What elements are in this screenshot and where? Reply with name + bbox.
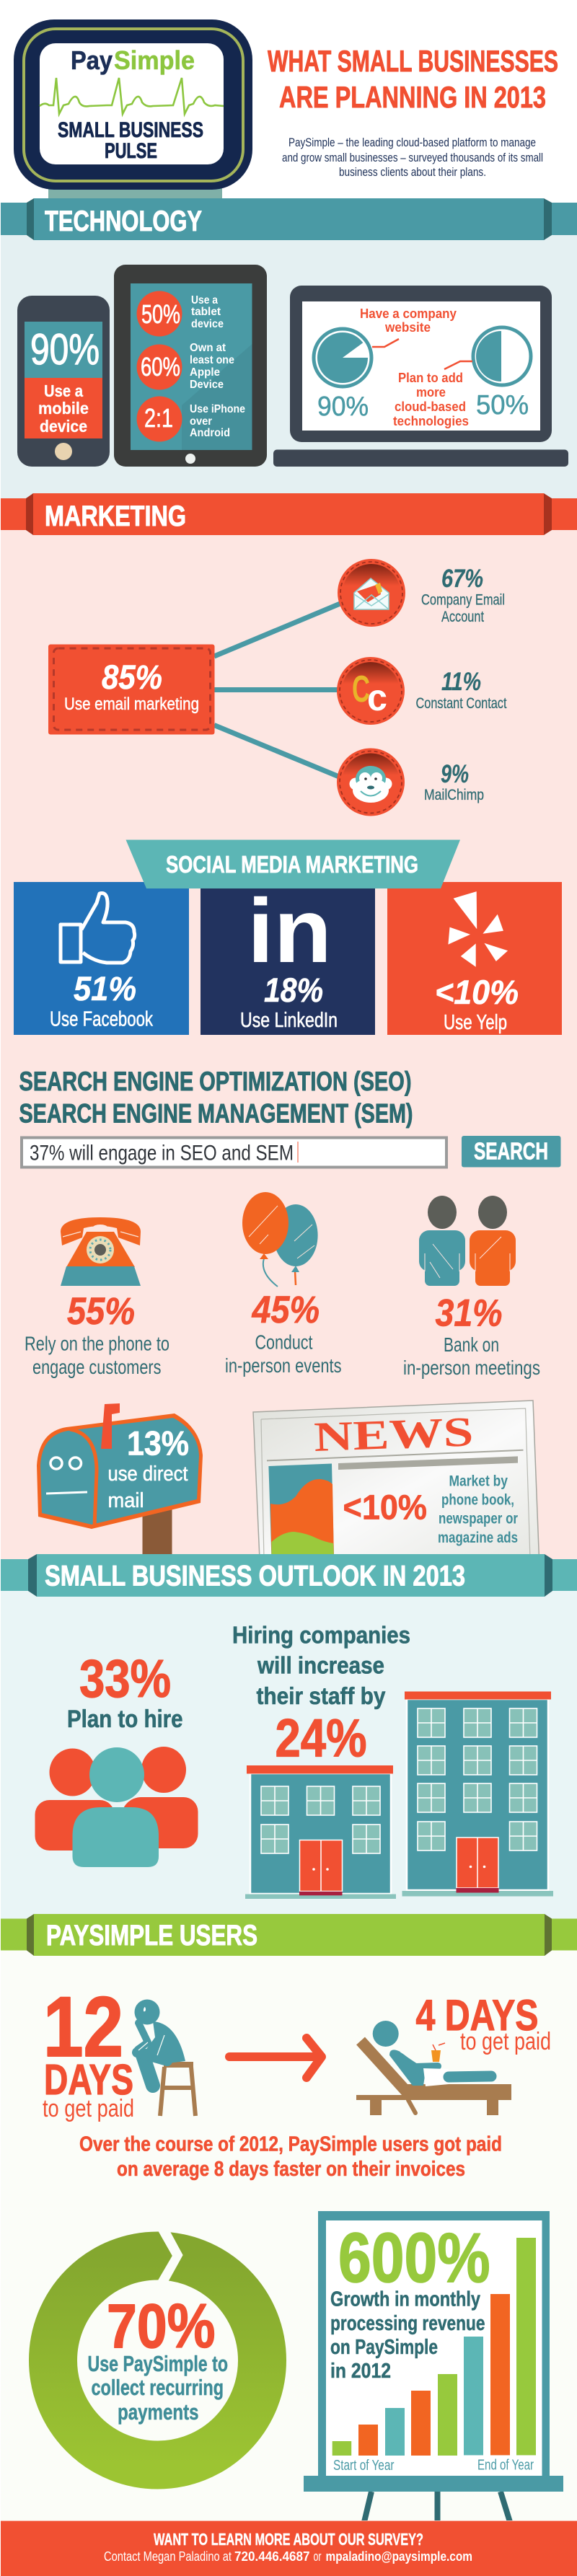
logo wordmark: Pay <box>71 45 113 75</box>
stat: meetings: in-person meetings <box>403 1357 540 1379</box>
tablet: device <box>191 318 224 330</box>
tablet: Android <box>190 427 230 439</box>
footer: or <box>313 2549 322 2564</box>
paysimple users banner <box>1 1914 577 1956</box>
facebook card <box>14 882 189 1035</box>
newspaper chart <box>268 1464 334 1559</box>
stat: phone: engage customers <box>32 1356 162 1378</box>
laptop captions: technologies <box>393 414 469 428</box>
icon: two people <box>419 1196 516 1286</box>
mailbox: 13% <box>127 1424 189 1463</box>
laptop <box>273 286 568 467</box>
laptop captions: cloud-based <box>395 400 466 414</box>
social media marketing banner: SOCIAL MEDIA MARKETING <box>166 851 418 878</box>
email service stats <box>415 565 507 803</box>
tablet: tablet <box>191 306 221 318</box>
tablet: Apple <box>190 366 220 379</box>
hiring companies text: 24% <box>276 1708 366 1768</box>
connector lines <box>214 603 342 777</box>
mailbox <box>37 1403 203 1559</box>
stat: events: in-person events <box>225 1354 342 1377</box>
donut chart: 70 percent: Use PaySimple to <box>88 2351 228 2376</box>
tablet: Own at <box>190 342 226 354</box>
donut chart: 70 percent: payments <box>118 2399 199 2425</box>
linkedin card: Use LinkedIn <box>240 1009 338 1032</box>
hiring companies text: Hiring companies <box>232 1621 410 1649</box>
hiring companies text <box>232 1621 410 1768</box>
presentation board: on PaySimple <box>330 2336 438 2359</box>
outlook banner: SMALL BUSINESS OUTLOOK IN 2013 <box>45 1561 465 1592</box>
tablet <box>114 265 267 467</box>
stat: meetings <box>403 1292 540 1379</box>
stat: events: 45% <box>252 1289 320 1331</box>
pie chart: 90 percent <box>314 329 399 422</box>
presentation board: in 2012 <box>330 2360 391 2383</box>
mobile phone: mobile <box>38 399 89 418</box>
logo wordmark: Simple <box>114 45 195 75</box>
logo monitor <box>14 19 252 200</box>
footer: Contact Megan Paladino at <box>104 2549 232 2564</box>
newspaper masthead: NEWS <box>313 1408 474 1460</box>
tablet: least one <box>190 354 234 366</box>
footer: 720.446.4687 <box>234 2549 310 2564</box>
email service stats: MailChimp <box>424 787 484 803</box>
search box <box>22 1138 446 1167</box>
search button <box>462 1136 561 1167</box>
faster payment statement: Over the course of 2012, PaySimple users got paid <box>79 2133 502 2156</box>
yelp card <box>387 882 562 1035</box>
title <box>268 44 558 114</box>
logo subtitle <box>58 118 203 163</box>
footer: mpaladino@paysimple.com <box>326 2549 472 2564</box>
icon: thumbs up <box>61 893 135 963</box>
icon: mailchimp <box>337 749 405 816</box>
icon: envelope <box>338 559 405 627</box>
icon: constant contact: C <box>352 669 370 710</box>
linkedin card: 18% <box>264 971 323 1009</box>
tablet: 60% <box>141 352 180 381</box>
newspaper: magazine ads <box>438 1530 518 1546</box>
yelp card: <10% <box>435 973 519 1011</box>
seo heading: SEARCH ENGINE MANAGEMENT (SEM) <box>19 1099 413 1128</box>
stat: phone: 55% <box>67 1290 135 1333</box>
newspaper: Market by <box>449 1473 508 1490</box>
icon: constant contact <box>337 657 405 725</box>
stat: 4 days <box>415 1991 551 2055</box>
stat: meetings: Bank on <box>444 1333 499 1356</box>
search box: 37% will engage in SEO and SEM <box>30 1141 294 1165</box>
pie chart: 50 percent: 50% <box>476 390 529 420</box>
icon: waiting person on stool <box>134 1999 195 2116</box>
tablet: over <box>190 415 212 428</box>
tablet: Use iPhone <box>190 403 245 415</box>
facebook card: 51% <box>74 969 136 1007</box>
mobile phone: device <box>40 417 87 436</box>
email service stats: Company Email <box>421 591 505 609</box>
intro text: business clients about their plans. <box>339 166 486 179</box>
pulse line <box>40 78 224 114</box>
stat: events <box>225 1289 342 1377</box>
icon: group of people <box>35 1747 198 1867</box>
pie chart: 50 percent <box>444 327 531 420</box>
linkedin card <box>201 880 375 1035</box>
stat: 12 days: to get paid <box>43 2095 134 2122</box>
small building <box>245 1765 396 1899</box>
facebook card: Use Facebook <box>50 1008 153 1031</box>
logo subtitle: PULSE <box>105 139 157 163</box>
email marketing box: 85% <box>102 658 162 696</box>
mailbox: use direct <box>108 1463 188 1486</box>
mobile phone: Use a <box>44 381 83 400</box>
hiring companies text: their staff by <box>257 1682 386 1709</box>
stat: 4 days: to get paid <box>460 2028 551 2055</box>
presentation board <box>304 2211 563 2522</box>
newspaper: phone book, <box>441 1491 514 1509</box>
seo heading <box>19 1067 413 1128</box>
faster payment statement <box>79 2133 502 2181</box>
outlook banner <box>1 1554 577 1597</box>
logo subtitle: SMALL BUSINESS <box>58 118 203 142</box>
social media marketing banner <box>125 839 460 888</box>
newspaper: newspaper or <box>439 1510 518 1527</box>
tablet: 2:1 <box>144 403 173 433</box>
laptop captions <box>360 306 469 428</box>
presentation board: 600% <box>338 2218 490 2297</box>
stat: 4 days: 4 DAYS <box>415 1991 538 2039</box>
faster payment statement: on average 8 days faster on their invoices <box>117 2158 465 2181</box>
intro text <box>282 136 543 179</box>
donut chart: 70 percent: 70% <box>107 2292 215 2361</box>
icon: rotary telephone <box>61 1217 141 1286</box>
tablet: Use a <box>191 294 218 306</box>
paysimple users banner: PAYSIMPLE USERS <box>46 1920 257 1951</box>
laptop captions: more <box>416 385 446 400</box>
icon: yelp burst <box>448 891 508 967</box>
stat: plan to hire: Plan to hire <box>67 1706 183 1733</box>
marketing banner: MARKETING <box>45 500 186 532</box>
stat: phone: Rely on the phone to <box>25 1333 169 1354</box>
donut chart: 70 percent <box>53 2230 263 2465</box>
laptop captions: website <box>384 320 431 335</box>
hiring companies text: will increase <box>257 1651 384 1679</box>
stat: phone <box>25 1290 169 1378</box>
email service stats: 11% <box>441 668 481 696</box>
tablet: Device <box>190 379 224 391</box>
marketing banner <box>1 493 577 535</box>
presentation board: Start of Year <box>333 2458 395 2474</box>
stat: plan to hire <box>67 1649 183 1733</box>
email service stats: 9% <box>441 760 469 788</box>
technology banner: TECHNOLOGY <box>45 206 202 237</box>
yelp card: Use Yelp <box>444 1011 507 1034</box>
presentation board: processing revenue <box>330 2312 485 2335</box>
stat: plan to hire: 33% <box>79 1649 171 1708</box>
donut chart: 70 percent: collect recurring <box>91 2375 224 2400</box>
icon: constant contact: c <box>367 677 387 719</box>
tall building <box>402 1692 553 1897</box>
stat: 12 days: 12 <box>43 1980 123 2075</box>
email service stats: 67% <box>441 565 483 593</box>
stat: events: Conduct <box>255 1331 313 1353</box>
arrow <box>229 2038 322 2078</box>
stat: meetings: 31% <box>436 1292 502 1334</box>
logo wordmark <box>71 45 195 75</box>
presentation board: End of Year <box>477 2458 534 2474</box>
footer: WANT TO LEARN MORE ABOUT OUR SURVEY? <box>154 2530 423 2549</box>
email marketing box <box>48 645 215 734</box>
stat: 12 days <box>43 1980 134 2122</box>
stat: 12 days: DAYS <box>44 2056 133 2104</box>
newspaper: <10% <box>343 1488 427 1527</box>
search button: SEARCH <box>474 1138 548 1164</box>
technology banner <box>1 198 577 240</box>
email marketing box: Use email marketing <box>64 694 199 714</box>
footer <box>1 2520 577 2576</box>
laptop captions: Plan to add <box>398 371 463 385</box>
bar chart <box>332 2238 536 2456</box>
seo heading: SEARCH ENGINE OPTIMIZATION (SEO) <box>19 1067 411 1096</box>
mailbox: mail <box>108 1489 144 1512</box>
pie chart: 90 percent: 90% <box>317 392 369 422</box>
icon: person relaxing on lounger <box>356 2021 511 2115</box>
laptop captions: Have a company <box>360 306 457 321</box>
newspaper <box>253 1401 539 1559</box>
icon: linkedin: in <box>247 880 332 982</box>
mobile phone: 90% <box>30 325 100 374</box>
tablet: 50% <box>141 299 180 329</box>
icon: balloons <box>242 1192 318 1287</box>
presentation board: Growth in monthly <box>330 2288 480 2311</box>
email service stats: Account <box>441 609 484 625</box>
mobile phone <box>17 296 110 467</box>
email service stats: Constant Contact <box>415 695 507 712</box>
